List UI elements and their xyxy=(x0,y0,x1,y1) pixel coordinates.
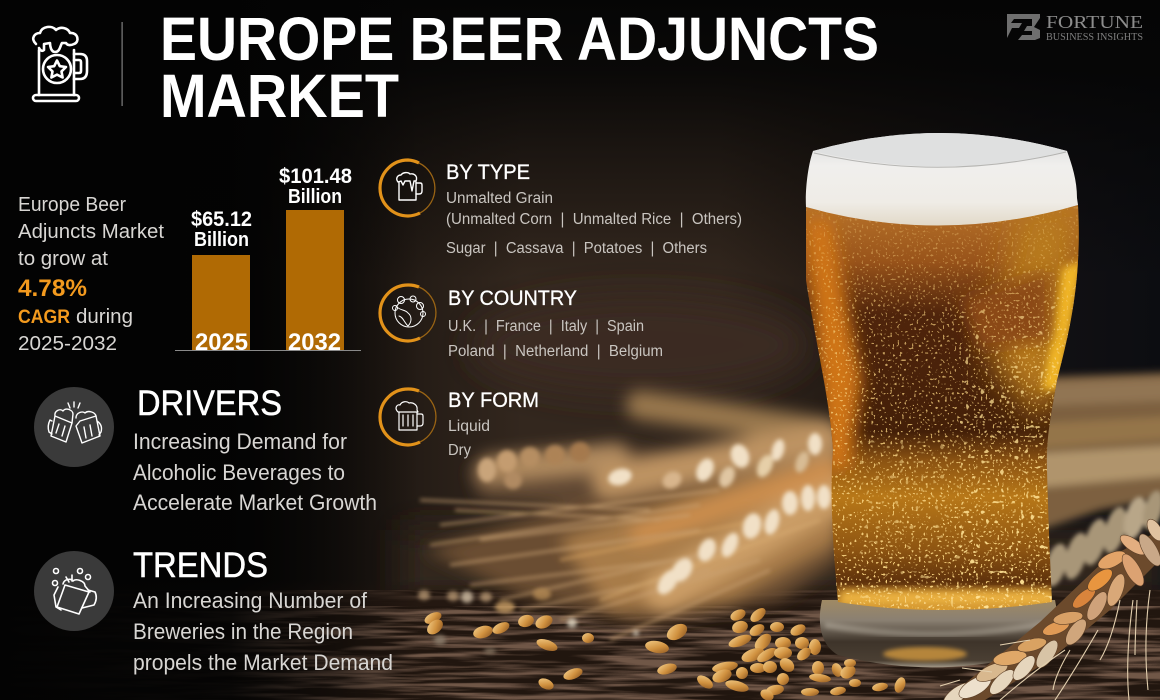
panel: drivers: Alcoholic Beverages to xyxy=(133,460,345,485)
growth statement: 4.78% xyxy=(18,275,87,302)
title: MARKET xyxy=(160,62,399,130)
beer glass xyxy=(800,133,1090,667)
panel: by country: Poland | Netherland | Belgium xyxy=(448,343,663,360)
icon: beer tankard in orange ring xyxy=(380,389,436,445)
panel: trends xyxy=(34,546,393,675)
panel: by country: U.K. | France | Italy | Spain xyxy=(448,318,644,335)
blurred wheat sheaf xyxy=(420,405,840,640)
foreground wheat ear xyxy=(940,517,1160,700)
left dark fade over photo xyxy=(0,0,420,700)
icon: beer mug in orange ring xyxy=(380,160,435,216)
bar chart: market size 2025 vs 2032 xyxy=(175,165,361,356)
panel: by type: Unmalted Grain xyxy=(446,190,553,207)
growth statement xyxy=(18,194,164,355)
logo: Fortune Business Insights xyxy=(1007,12,1143,43)
far wheat behind the glass xyxy=(1010,372,1160,540)
blurred tabletop backdrop xyxy=(400,295,1160,600)
scattered wheat grains xyxy=(423,605,907,700)
logo: Fortune Business Insights: BUSINESS INSIGHTS xyxy=(1046,32,1143,43)
icon: toasting mugs with bubbles xyxy=(34,551,114,631)
panel: drivers: Increasing Demand for xyxy=(133,429,347,454)
foam head xyxy=(806,133,1078,226)
icon: clinking mugs xyxy=(34,387,114,467)
panel: by form: Dry xyxy=(448,442,471,459)
panel: drivers: Accelerate Market Growth xyxy=(133,490,377,515)
logo: Fortune Business Insights: FORTUNE xyxy=(1046,12,1143,32)
panel: by country: BY COUNTRY xyxy=(448,287,577,310)
panel: drivers xyxy=(34,384,377,515)
growth statement: 2025-2032 xyxy=(18,333,117,355)
blurred wheat grains in the ears xyxy=(478,433,831,598)
icon: globe in orange ring xyxy=(380,285,436,341)
panel: trends: propels the Market Demand xyxy=(133,650,393,675)
panel: by type: BY TYPE xyxy=(446,161,530,184)
title xyxy=(160,5,879,130)
bar: 2032 xyxy=(279,165,352,356)
out-of-focus grains on the table xyxy=(418,588,639,654)
panel: trends: TRENDS xyxy=(133,546,268,585)
panel: trends: Breweries in the Region xyxy=(133,619,353,644)
panel: by type: Sugar | Cassava | Potatoes | Others xyxy=(446,240,707,257)
panel: by type: (Unmalted Corn | Unmalted Rice | Others) xyxy=(446,211,742,228)
title: EUROPE BEER ADJUNCTS xyxy=(160,5,879,73)
bar: 2032: 2032 xyxy=(288,329,341,356)
panel: by type xyxy=(380,160,742,257)
blurred wheat ear behind foreground ear xyxy=(1041,488,1160,589)
growth statement: during xyxy=(76,306,133,328)
panel: by form xyxy=(380,389,539,459)
beer body with bubbles xyxy=(800,200,1090,620)
bar: 2025 xyxy=(191,208,252,356)
panel: drivers: DRIVERS xyxy=(137,384,282,423)
glass base xyxy=(820,600,1058,667)
panel: by form: BY FORM xyxy=(448,389,539,412)
growth statement: CAGR xyxy=(18,307,70,328)
header xyxy=(33,5,1143,130)
growth statement: to grow at xyxy=(18,248,108,270)
growth statement: Europe Beer xyxy=(18,194,126,216)
panel: by form: Liquid xyxy=(448,418,490,435)
header divider xyxy=(122,22,123,106)
bar: 2025: 2025 xyxy=(195,329,248,356)
bar: 2025: Billion xyxy=(194,229,249,251)
wooden table xyxy=(0,580,1160,700)
icon: beer mug with star xyxy=(33,27,87,101)
bar: 2032: Billion xyxy=(288,186,342,208)
panel: by country xyxy=(380,285,663,360)
bar: 2032: $101.48 xyxy=(279,165,352,188)
bar: 2025: $65.12 xyxy=(191,208,252,231)
growth statement: Adjuncts Market xyxy=(18,221,164,243)
panel: trends: An Increasing Number of xyxy=(133,588,368,613)
